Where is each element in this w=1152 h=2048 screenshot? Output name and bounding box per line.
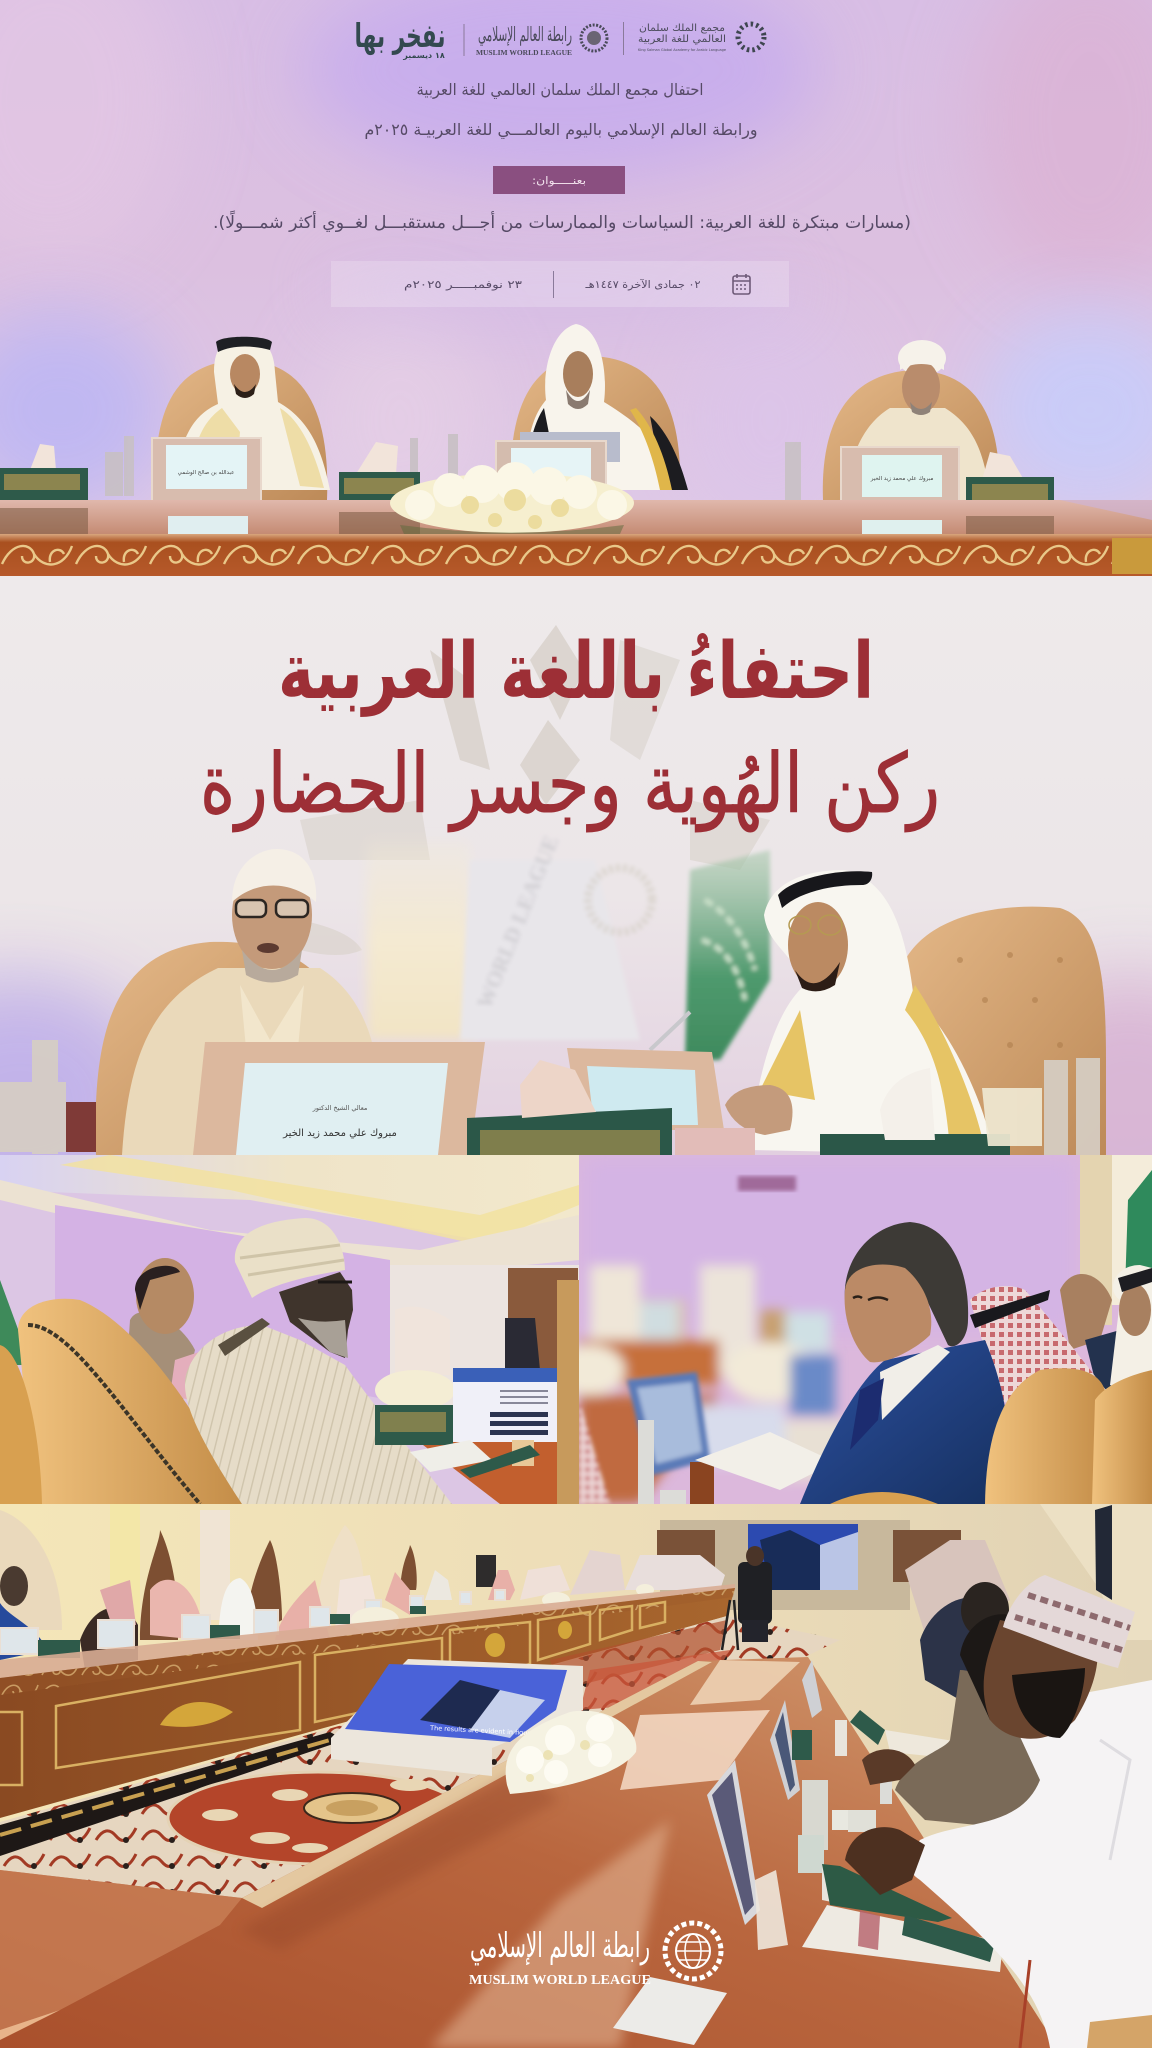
name screen: right bbox=[841, 447, 959, 507]
table ornamental band bbox=[0, 534, 1152, 576]
blurred backdrop seated figures bbox=[555, 1265, 870, 1504]
logo: Nafkhar Biha: ١٨ ديسمبر bbox=[402, 51, 445, 60]
tissue box: left bbox=[0, 468, 88, 501]
tissue box bbox=[467, 1060, 672, 1155]
logo: Muslim World League: MUSLIM WORLD LEAGUE bbox=[476, 48, 572, 57]
table stand screen bbox=[331, 1659, 583, 1776]
date panel: ٢٣ نوفمبـــــر ٢٠٢٥م bbox=[404, 279, 522, 291]
chair: centre bbox=[513, 356, 680, 464]
chair corner bottom right bbox=[1087, 2015, 1152, 2048]
icon: calendar bbox=[733, 274, 750, 294]
flower arrangement bbox=[390, 462, 634, 534]
logo: Muslim World League: رابطة العالم الإسلامي bbox=[478, 22, 572, 47]
badge: title label bbox=[493, 166, 625, 194]
person: delegate in white robe and turban bbox=[185, 1218, 452, 1504]
person: red shemagh bbox=[970, 1286, 1110, 1420]
glass and bottle bbox=[638, 1420, 714, 1504]
logo: Nafkhar Biha bbox=[356, 22, 445, 60]
white coaster pad bbox=[613, 1977, 727, 2045]
name screen: left: عبدالله بن صالح الوشمي bbox=[178, 470, 234, 476]
person: left speaker bbox=[122, 849, 380, 1155]
person behind bbox=[128, 1258, 205, 1420]
wall: lilac backdrop bbox=[55, 1205, 390, 1400]
name screen: large: معالي الشيخ الدكتور bbox=[312, 1104, 367, 1112]
person: right speaker bbox=[725, 870, 994, 1155]
logo: King Salman Global Academy: King Salman Global Academy for Arabic Language bbox=[638, 48, 726, 52]
far doorway and curtains bbox=[390, 1265, 580, 1405]
laptops and bottles along main table bbox=[707, 1660, 968, 1950]
panel: delegate in turban bbox=[0, 1155, 580, 1504]
logo: Muslim World League white: رابطة العالم الإسلامي bbox=[470, 1926, 650, 1966]
chair: second foreground bbox=[1092, 1370, 1152, 1504]
date panel bbox=[331, 261, 789, 307]
tissue tops bbox=[30, 442, 1024, 480]
ceiling bbox=[0, 1155, 579, 1240]
tissue box: centre bbox=[339, 472, 420, 500]
name screen: right: مبروك علي محمد زيد الخير bbox=[870, 476, 933, 482]
flag: green bbox=[685, 850, 770, 1060]
flowers far table bbox=[351, 1584, 654, 1633]
chair edge divider bbox=[557, 1280, 579, 1504]
logo: King Salman Global Academy: العالمي للغة العربية bbox=[638, 34, 726, 45]
flag stub bbox=[0, 1280, 22, 1365]
chair: first foreground bbox=[985, 1368, 1106, 1504]
tissue boxes far table bbox=[38, 1606, 426, 1658]
far right delegates row bbox=[905, 1504, 1152, 1700]
chair: right speaker bbox=[900, 907, 1106, 1155]
flag: cream bbox=[367, 840, 470, 1040]
flowers: background bbox=[375, 1370, 455, 1410]
subtitle: session theme: (مسارات مبتكرة للغة العربية: السياسات والممارسات من أجـــل مستقبـــل لغــوي أكثر شمـــولًا). bbox=[213, 209, 911, 233]
background men bbox=[1060, 1265, 1152, 1400]
table top bbox=[0, 500, 1152, 535]
person: left seated speaker bbox=[176, 337, 330, 490]
camera operator bbox=[722, 1546, 772, 1650]
logo: Muslim World League white bbox=[469, 1923, 721, 1988]
carpet bbox=[0, 1616, 840, 1900]
documents bbox=[695, 1432, 835, 1490]
flower arrangement on main table bbox=[506, 1711, 636, 1794]
right curtain and flag bbox=[1080, 1155, 1152, 1325]
main table wood surface bbox=[0, 1657, 1058, 2048]
icon: globe and wreath bbox=[665, 1923, 721, 1979]
person: centre seated speaker bbox=[524, 324, 688, 490]
flag: white Muslim World League bbox=[460, 832, 652, 1040]
name screen: left bbox=[152, 438, 261, 501]
table corner bbox=[375, 1405, 558, 1504]
water bottles and cups bbox=[0, 1040, 1100, 1155]
chair: left speaker bbox=[95, 942, 345, 1155]
arches left wall bbox=[0, 1504, 417, 1640]
badge: title label: بعنـــــوان: bbox=[532, 175, 586, 187]
person: man in blue suit bbox=[800, 1222, 1011, 1504]
shemagh foreground left bbox=[579, 1400, 610, 1504]
panel: wide hall view bbox=[0, 1504, 1152, 2048]
name screen: large: مبروك علي محمد زيد الخير bbox=[282, 1128, 397, 1139]
person: delegate in white with cap bbox=[845, 1575, 1152, 2048]
logo: Nafkhar Biha: نفخر بها bbox=[354, 16, 446, 56]
far table top bbox=[0, 1584, 735, 1680]
wall gradient bbox=[579, 1155, 1079, 1335]
name screens far table bbox=[0, 1590, 505, 1654]
chair: right bbox=[823, 370, 999, 500]
logo: King Salman Global Academy: مجمع الملك سلمان bbox=[639, 23, 725, 34]
panel: delegate in blue suit bbox=[555, 1155, 1152, 1504]
blurred banner bbox=[738, 1176, 796, 1191]
bottles and glasses bbox=[105, 434, 801, 502]
person: brown jacket bbox=[862, 1614, 1050, 1830]
seated delegates along the far table bbox=[0, 1550, 725, 1670]
paper reflection and second tissue box bbox=[675, 1068, 1010, 1155]
microphone bbox=[650, 1012, 690, 1050]
panel: stage photo with event backdrop bbox=[0, 0, 1152, 576]
far table front panels bbox=[0, 1588, 735, 1818]
name screen: small bbox=[567, 1048, 724, 1130]
tissue box: right bbox=[966, 477, 1054, 500]
heading line 2: ورابطة العالم الإسلامي باليوم العالمـــي للغة العربيـة ٢٠٢٥م bbox=[364, 120, 758, 140]
flag: white Muslim World League: WORLD LEAGUE bbox=[471, 832, 564, 1012]
folder and brochure bbox=[802, 1864, 1003, 1972]
logo: Muslim World League bbox=[464, 22, 607, 57]
heading line 1: احتفال مجمع الملك سلمان العالمي للغة العربية bbox=[416, 80, 704, 100]
chair: foreground bbox=[0, 1299, 242, 1504]
panel: headline with two speakers bbox=[0, 625, 1152, 1155]
chair: left bbox=[155, 360, 327, 500]
title line 1: احتفاءُ باللغة العربية bbox=[278, 627, 874, 717]
carpet medallion bbox=[168, 1772, 468, 1864]
logo: Muslim World League white: MUSLIM WORLD LEAGUE bbox=[469, 1973, 651, 1988]
title line 2: ركن الهُوية وجسر الحضارة bbox=[200, 737, 940, 832]
name screen: large bbox=[193, 1042, 485, 1155]
brochure bbox=[802, 1905, 1003, 1972]
table stand screen: The results are evident in figures and statistics bbox=[429, 1724, 583, 1740]
name screen: centre bbox=[495, 432, 620, 484]
person: right seated delegate bbox=[858, 340, 985, 500]
chair foreground sliver bbox=[830, 1492, 938, 1504]
watermark: calligraphy bbox=[300, 625, 770, 955]
stage wall and big screen bbox=[657, 1520, 961, 1610]
laptop bbox=[453, 1368, 558, 1442]
laptop blurred bbox=[627, 1372, 710, 1476]
logo: King Salman Global Academy bbox=[623, 22, 764, 55]
documents and glass bbox=[410, 1440, 540, 1478]
date panel: ٠٢ جمادى الآخرة ١٤٤٧هـ bbox=[584, 278, 701, 291]
